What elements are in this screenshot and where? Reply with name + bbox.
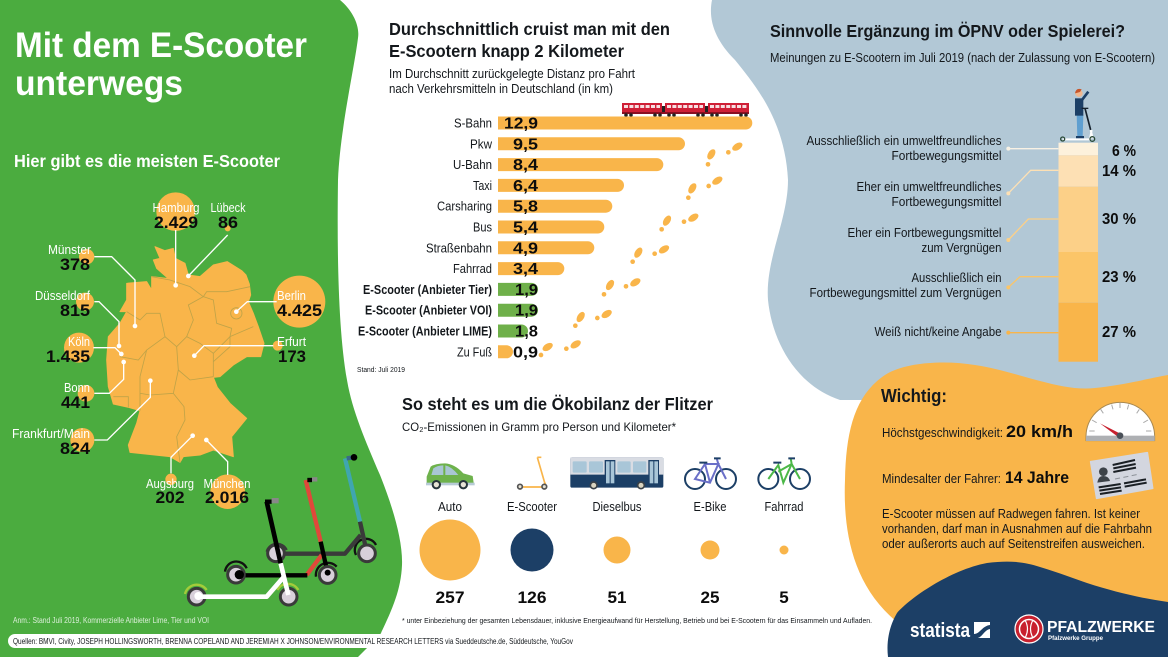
values: [504, 116, 538, 361]
values: 1,9: [515, 303, 538, 320]
percentages: [1102, 143, 1136, 341]
scooter bars: [498, 283, 538, 338]
note: Anm.: Anm.: Stand Juli 2019, Kommerzielle Anbieter Lime, Tier und VOI: [13, 616, 209, 625]
category labels: U-Bahn: [453, 158, 492, 172]
opinion labels: [806, 134, 1002, 339]
city labels: Düsseldorf: [35, 288, 90, 303]
percentages: 23 %: [1102, 269, 1136, 286]
vehicle labels: Auto: [438, 500, 462, 514]
back scooter: [267, 454, 376, 562]
city labels: 4.425: [277, 302, 322, 320]
heading: distance chart: Durchschnittlich cruist man mit den: [389, 19, 670, 39]
category labels: E-Scooter (Anbieter Tier): [363, 283, 492, 297]
vehicle labels: Dieselbus: [592, 500, 642, 514]
panel: yellow important background: [845, 362, 1168, 657]
heading: cities: Hier gibt es die meisten E-Scooter: [14, 151, 280, 171]
icon: speedometer: [1086, 402, 1155, 441]
opinion labels: Eher ein Fortbewegungsmittel: [848, 226, 1002, 240]
category labels: Straßenbahn: [426, 241, 492, 255]
city labels: 441: [61, 394, 90, 412]
opinion labels: zum Vergnügen: [922, 241, 1002, 255]
subheading: eco balance: CO₂-Emissionen in Gramm pro Person und Kilometer*: [402, 420, 676, 434]
city labels: München: [204, 476, 250, 491]
icon: id card: [1091, 453, 1153, 498]
opinion labels: Fortbewegungsmittel zum Vergnügen: [810, 286, 1002, 300]
city labels: 173: [278, 348, 306, 366]
icon: e-scooter: [518, 457, 547, 489]
city labels: Hamburg: [152, 200, 200, 215]
city labels: 378: [60, 256, 90, 274]
fact: minimum age: [882, 469, 1069, 487]
vehicle labels: E-Bike: [694, 500, 727, 514]
category labels: S-Bahn: [454, 116, 492, 130]
icon: bicycle: [758, 458, 810, 489]
heading: distance chart: E-Scootern knapp 2 Kilometer: [389, 41, 624, 61]
bubble chart: CO2 emissions: [420, 500, 804, 607]
values: 51: [608, 588, 626, 607]
category labels: E-Scooter (Anbieter LIME): [358, 324, 492, 338]
icon: e-bike: [685, 458, 736, 489]
city labels: 824: [60, 440, 91, 458]
front scooter: [185, 501, 298, 605]
map outline: [107, 247, 264, 462]
map state borders: [113, 277, 253, 462]
panel: green background: [0, 0, 402, 657]
leader lines: opinions: [1006, 147, 1058, 335]
city labels: Berlin: [277, 288, 306, 303]
stacked bar: opinions: [1058, 143, 1136, 362]
opinion labels: Ausschließlich ein umweltfreundliches: [806, 134, 1002, 148]
heading: opinions: Sinnvolle Ergänzung im ÖPNV oder Spielerei?: [770, 21, 1125, 41]
values: 1,8: [515, 324, 538, 340]
middle scooter: [225, 479, 337, 583]
heading: distance chart: [389, 19, 670, 61]
opinion labels: Weiß nicht/keine Angabe: [874, 325, 1002, 339]
bars: [498, 116, 752, 358]
footnote: * unter Einbeziehung der gesamten Lebensdauer, inklusive Energieaufwand für Herstellung, Betrieb und bei E-Scootern für das Einsammeln und Aufladen.: [402, 616, 872, 625]
subheading: distance chart: Im Durchschnitt zurückgelegte Distanz pro Fahrt: [389, 67, 635, 81]
icon: car: [426, 463, 475, 488]
logo: statista: statista: [910, 620, 971, 642]
logo: Pfalzwerke: [1015, 615, 1155, 643]
values: [436, 588, 789, 607]
city labels: Münster: [48, 242, 92, 257]
fact: minimum age: 14 Jahre: [1005, 469, 1069, 487]
values: 3,4: [513, 261, 538, 278]
city dots: [117, 274, 239, 442]
vehicle labels: E-Scooter: [507, 500, 557, 514]
logo: Pfalzwerke: PFALZWERKE: [1047, 619, 1155, 636]
heading: eco balance: So steht es um die Ökobilanz der Flitzer: [402, 394, 713, 414]
values: 126: [518, 588, 546, 607]
city labels: Bonn: [64, 380, 90, 395]
fact: maximum speed: 20 km/h: [1006, 423, 1073, 441]
city labels: Köln: [68, 334, 90, 349]
category labels: E-Scooter (Anbieter VOI): [365, 304, 492, 318]
city labels: Frankfurt/Main: [12, 426, 90, 441]
icons: vehicles: [426, 457, 810, 489]
percentages: 30 %: [1102, 211, 1136, 228]
fact: maximum speed: [882, 423, 1073, 441]
values: 8,4: [513, 157, 538, 174]
values: 5,8: [513, 199, 538, 216]
category labels: [358, 116, 493, 359]
values: 6,4: [513, 178, 538, 195]
text: rules: [882, 506, 1152, 551]
city labels: 1.435: [46, 348, 90, 366]
bar chart: distance per trip: [358, 116, 752, 361]
icon: bus: [570, 457, 663, 489]
icon: footprints: [539, 141, 744, 357]
opinion labels: Ausschließlich ein: [912, 271, 1002, 285]
map: Germany with city bubbles: [64, 192, 325, 509]
category labels: Pkw: [470, 137, 493, 151]
bubbles: [420, 520, 480, 580]
vehicle labels: Fahrrad: [764, 500, 804, 514]
city leader lines: [93, 230, 277, 475]
city labels: 2.016: [205, 489, 249, 507]
opinion labels: Eher ein umweltfreundliches: [856, 180, 1002, 194]
city labels: [12, 200, 322, 507]
values: 5,4: [513, 220, 538, 236]
subheading: distance chart: nach Verkehrsmitteln in Deutschland (in km): [389, 82, 613, 96]
values: 5: [779, 588, 789, 607]
values: 12,9: [504, 116, 538, 132]
fact: maximum speed: Höchstgeschwindigkeit:: [882, 426, 1003, 440]
panel: navy logo background: [887, 562, 1168, 657]
illustration: three e-scooters: [185, 454, 376, 605]
logo: Pfalzwerke: Pfalzwerke Gruppe: [1048, 635, 1103, 642]
title: Mit dem E-Scooter: [15, 26, 307, 65]
values: 0,9: [513, 344, 538, 361]
note: Stand: Stand: Juli 2019: [357, 367, 405, 374]
icon: train: [622, 103, 749, 117]
values: 25: [700, 588, 720, 607]
opinion labels: Fortbewegungsmittel: [892, 195, 1002, 209]
opinion labels: Fortbewegungsmittel: [892, 149, 1002, 163]
city labels: 86: [218, 214, 238, 232]
city labels: Lübeck: [210, 200, 246, 215]
subheading: distance chart: [389, 67, 635, 96]
city labels: Augsburg: [146, 476, 194, 491]
text: rules: E-Scooter müssen auf Radwegen fahren. Ist keiner: [882, 506, 1141, 521]
percentages: 14 %: [1102, 163, 1136, 180]
category labels: Zu Fuß: [457, 345, 492, 359]
city labels: 2.429: [154, 214, 198, 232]
category labels: Carsharing: [437, 200, 492, 214]
heading: important: Wichtig:: [881, 386, 947, 406]
values: 1,9: [515, 282, 538, 299]
city labels: 202: [156, 489, 184, 507]
panel: blue opinion background: [711, 0, 1168, 400]
city labels: Erfurt: [277, 334, 306, 349]
percentages: 27 %: [1102, 324, 1136, 341]
city bubbles: [64, 192, 325, 509]
category labels: Taxi: [473, 179, 492, 193]
vehicle labels: [438, 500, 804, 514]
icon: person on scooter: [1061, 89, 1095, 141]
fact: minimum age: Mindesalter der Fahrer:: [882, 472, 1001, 486]
category labels: Fahrrad: [453, 262, 492, 276]
values: 9,5: [513, 136, 538, 153]
title: unterwegs: [15, 64, 183, 103]
source strip: [8, 634, 573, 648]
percentages: 6 %: [1112, 143, 1136, 160]
values: 257: [436, 588, 464, 607]
category labels: Bus: [473, 220, 492, 234]
title: [15, 26, 307, 103]
values: 4,9: [513, 240, 538, 257]
city labels: 815: [60, 302, 90, 320]
source strip: Quellen: BMVI, Civity, JOSEPH HOLLINGSWORTH, BRENNA COPELAND AND JEREMIAH X JOHNSON/ENVIRONMENTAL RESEARCH LETTERS via Sueddeutsche.de, Süddeutsche, YouGov: [13, 637, 573, 646]
